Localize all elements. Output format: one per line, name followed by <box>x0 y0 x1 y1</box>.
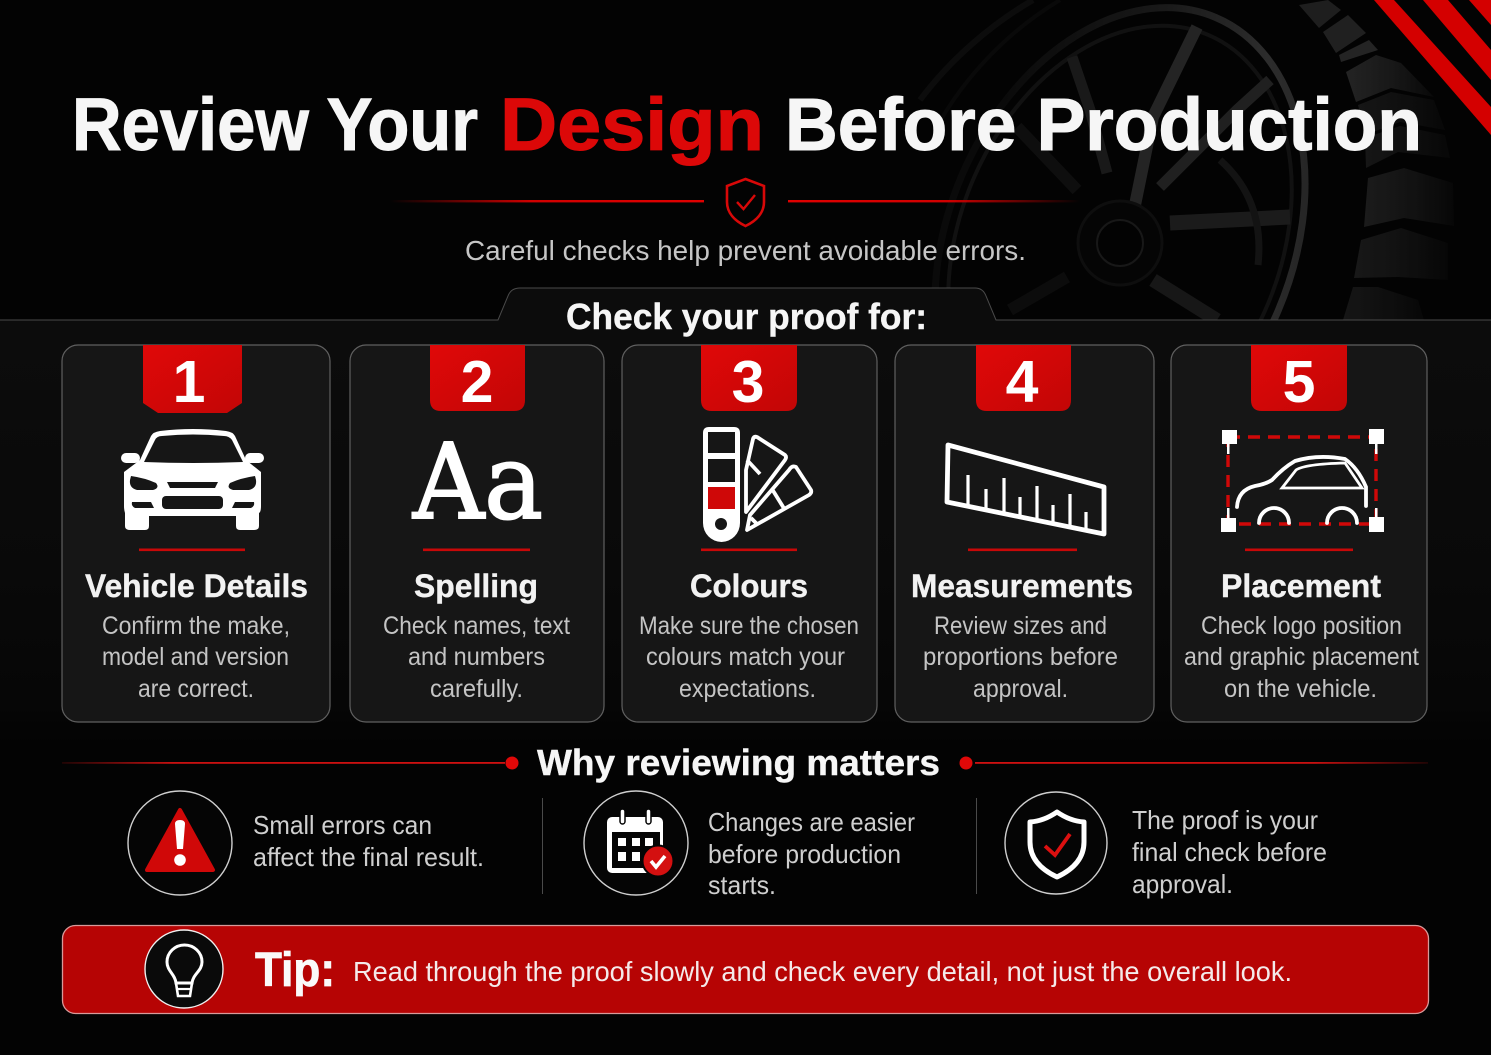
section panel with tab <box>0 288 1491 745</box>
title <box>72 83 1422 166</box>
description: are correct. <box>138 675 254 703</box>
title: Review Your <box>72 83 478 166</box>
description: and graphic placement <box>1184 643 1419 671</box>
icon: ruler <box>947 445 1104 534</box>
description: approval. <box>973 675 1068 703</box>
badge 5: 5 <box>1283 349 1315 415</box>
badge 3: 3 <box>732 349 764 415</box>
badge 4 <box>976 345 1071 415</box>
icon: car in placement frame <box>1221 429 1384 532</box>
heading: Vehicle Details <box>85 568 308 604</box>
title: Before Production <box>785 83 1422 166</box>
reason text: The proof is your <box>1132 805 1318 835</box>
heading: Spelling <box>414 568 538 604</box>
tip banner <box>62 926 1428 1014</box>
why reviewing matters heading: Why reviewing matters <box>537 742 940 783</box>
icon: car front <box>121 429 264 530</box>
description: model and version <box>102 643 289 671</box>
description: Check logo position <box>1201 612 1402 640</box>
reason: changes are easier <box>584 791 915 900</box>
icon: shield with check <box>1005 792 1107 894</box>
reason text: final check before <box>1132 837 1327 867</box>
reason: small errors <box>128 791 484 895</box>
icon: calendar with check <box>584 791 688 895</box>
badge 2: 2 <box>461 349 493 415</box>
badge 4: 4 <box>1006 349 1039 415</box>
panel: placement <box>1171 345 1427 722</box>
reason text: approval. <box>1132 869 1233 899</box>
description: colours match your <box>646 643 845 671</box>
reason text <box>253 810 484 872</box>
description <box>102 612 290 703</box>
reason text <box>1132 805 1327 899</box>
reason text: Small errors can <box>253 810 432 840</box>
description: and numbers <box>408 643 545 671</box>
reason text <box>708 807 915 900</box>
title divider with shield icon <box>390 179 1080 226</box>
icon: warning triangle <box>128 791 232 895</box>
heading: Measurements <box>911 568 1133 604</box>
description: expectations. <box>679 675 816 703</box>
panel: vehicle details <box>62 345 330 722</box>
icon: Aa letters: Aa <box>412 421 543 543</box>
tip label: Tip: <box>255 944 335 997</box>
description: on the vehicle. <box>1224 675 1377 703</box>
description: proportions before <box>923 643 1118 671</box>
badge 2 <box>430 345 525 415</box>
description: Review sizes and <box>934 612 1107 640</box>
badge 1 <box>143 345 242 415</box>
icon: colour swatch fan <box>703 427 811 542</box>
why reviewing matters heading <box>62 742 1428 783</box>
tip text: Read through the proof slowly and check every detail, not just the overall look. <box>353 956 1292 987</box>
heading: Colours <box>690 568 808 604</box>
reason text: affect the final result. <box>253 842 484 872</box>
description <box>1184 612 1419 703</box>
heading: Placement <box>1221 568 1381 604</box>
background wheel and tyre <box>918 0 1439 320</box>
badge 3 <box>701 345 797 415</box>
title: Design <box>500 83 764 166</box>
decorative red corner stripes <box>1374 0 1491 135</box>
badge 5 <box>1251 345 1347 415</box>
panel: measurements <box>895 345 1154 722</box>
description <box>639 612 859 703</box>
description: Make sure the chosen <box>639 612 859 640</box>
icon: light bulb <box>145 930 223 1008</box>
badge 1: 1 <box>173 349 205 415</box>
subtitle: Careful checks help prevent avoidable errors. <box>465 235 1026 266</box>
reason text: Changes are easier <box>708 807 915 837</box>
description <box>923 612 1118 703</box>
panel: colours <box>622 345 877 722</box>
description <box>383 612 570 703</box>
panel: spelling <box>350 345 604 722</box>
section heading: Check your proof for: <box>566 296 927 337</box>
reason text: starts. <box>708 870 776 900</box>
description: carefully. <box>430 675 523 703</box>
description: Check names, text <box>383 612 570 640</box>
description: Confirm the make, <box>102 612 290 640</box>
reason text: before production <box>708 839 901 869</box>
reason: final check <box>1005 792 1327 899</box>
